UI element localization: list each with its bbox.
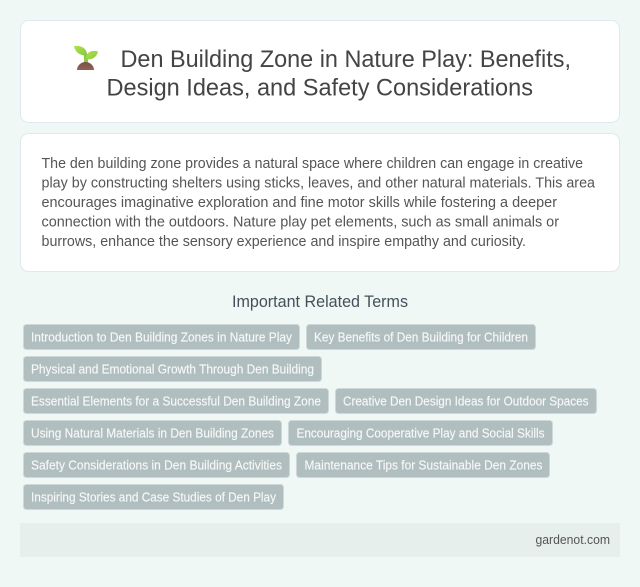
tag: Safety Considerations in Den Building Activities xyxy=(31,458,282,472)
text block: description: play by constructing shelters using sticks, leaves, and other natural materials. This area xyxy=(42,176,596,192)
tag: Maintenance Tips for Sustainable Den Zones xyxy=(304,458,542,472)
text block: description: connection with the outdoors. Nature play pet elements, such as small animals or xyxy=(42,214,559,230)
tag: Essential Elements for a Successful Den Building Zone xyxy=(31,394,321,408)
tag xyxy=(306,324,536,350)
tag: Key Benefits of Den Building for Children xyxy=(314,330,528,344)
tag list xyxy=(24,324,596,510)
text block: description: burrows, enhance the sensory experience and inspire empathy and curiosity. xyxy=(42,234,526,250)
tag xyxy=(288,420,552,446)
text block: description xyxy=(42,156,596,250)
tag xyxy=(24,356,322,382)
title xyxy=(106,46,571,102)
tag: Physical and Emotional Growth Through Den Building xyxy=(31,362,314,376)
text block: description: The den building zone provides a natural space where children can engage in creative xyxy=(42,156,583,172)
tag xyxy=(296,452,550,478)
tag: Using Natural Materials in Den Building Zones xyxy=(31,426,274,440)
text block: description: encourages imaginative exploration and fine motor skills while fostering a deeper xyxy=(42,195,557,211)
tag xyxy=(24,324,300,350)
icon: seedling xyxy=(74,46,98,70)
footer source text: gardenot.com xyxy=(536,532,610,547)
tag xyxy=(24,420,282,446)
tag xyxy=(24,484,284,510)
tag: Creative Den Design Ideas for Outdoor Spaces xyxy=(343,394,588,408)
panel: title card xyxy=(20,20,620,122)
tag: Introduction to Den Building Zones in Nature Play xyxy=(31,330,293,344)
heading: important related terms: Important Related Terms xyxy=(232,293,408,311)
tag: Inspiring Stories and Case Studies of Den Play xyxy=(31,490,277,504)
panel: description card xyxy=(20,134,620,272)
tag: Encouraging Cooperative Play and Social Skills xyxy=(296,426,544,440)
footer xyxy=(20,523,620,557)
tag xyxy=(24,388,328,414)
tag xyxy=(336,388,596,414)
tag xyxy=(24,452,290,478)
title: Design Ideas, and Safety Considerations xyxy=(106,74,533,102)
title: Den Building Zone in Nature Play: Benefits, xyxy=(120,46,571,73)
